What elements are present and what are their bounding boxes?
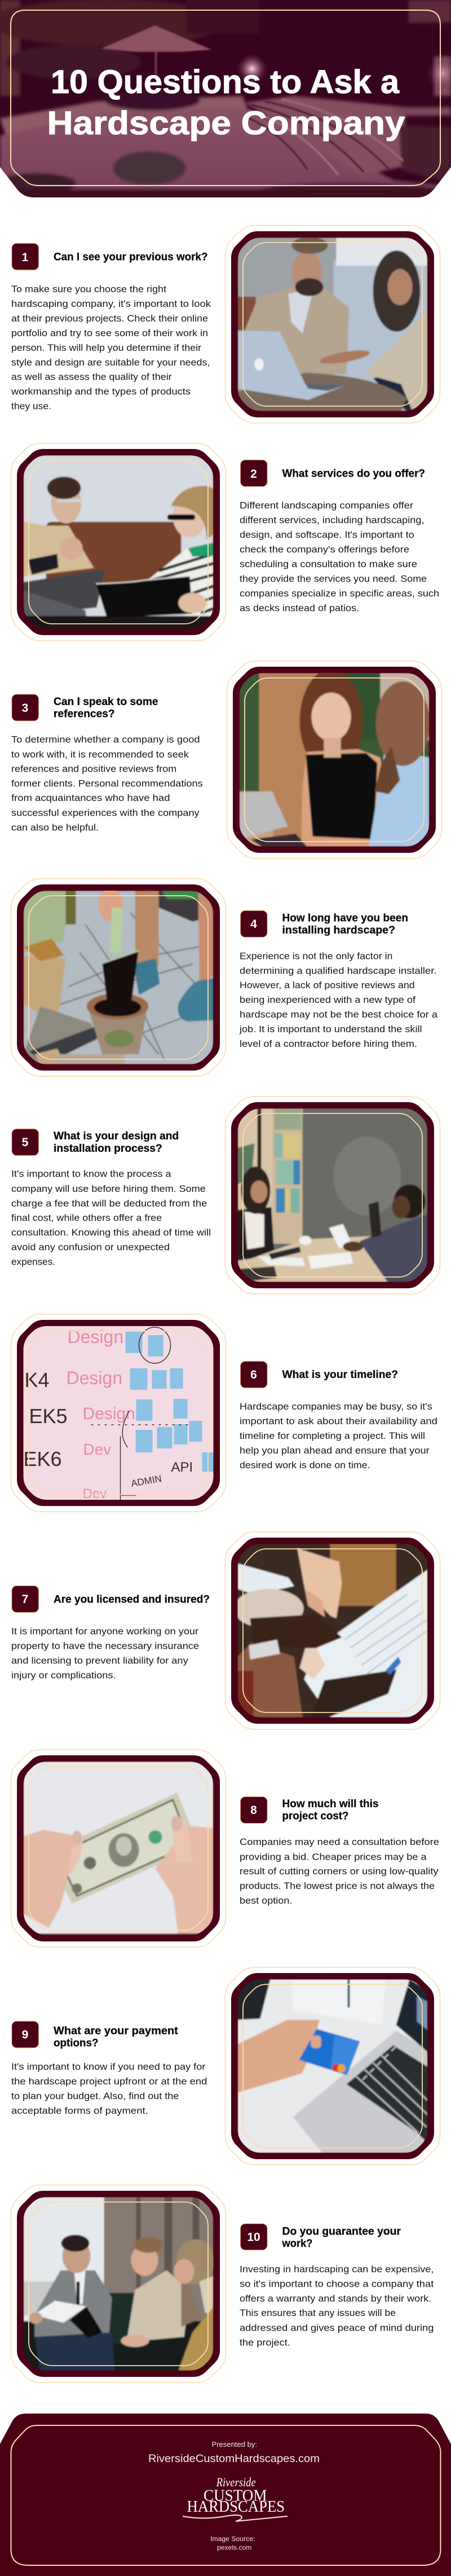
logo [183,2475,288,2521]
body text 2: check the company's offerings before [240,544,409,554]
heading 9 [54,2025,178,2049]
image source link: pexels.com [217,2544,251,2552]
photo frame 8: hands holding a dollar bill [11,1750,226,1947]
body text 10: offers a warranty and stands by their work. [240,2293,431,2304]
heading 7: Are you licensed and insured? [54,1593,210,1605]
body text 8: products. The lowest price is not always the [240,1881,435,1891]
photo frame 6: whiteboard with sticky notes: ADMIN [130,1473,162,1489]
body text 4: being inexperienced with a new type of [240,994,415,1005]
heading 3 [54,695,158,720]
body text 1: at their previous projects. Check their online [11,313,208,324]
body text 1: as well as assess the quality of their [11,371,172,382]
body text 7 [11,1626,199,1680]
body text 5: company will use before hiring them. Some [11,1183,206,1194]
body text 8: Companies may need a consultation before [240,1837,439,1847]
body text 4: hardscape may not be the best choice for a [240,1009,438,1020]
photo frame 10: three people on a sofa [11,2185,226,2383]
body text 4: determining a qualified hardscape installer. [240,966,436,976]
number badge 4: 4 [250,918,257,931]
photo frame 6: whiteboard with sticky notes: Design [67,1368,122,1388]
heading 10: Do you guarantee your [282,2225,401,2238]
body text 5 [11,1169,211,1267]
number badge 9 [11,2021,39,2048]
body text 10: Investing in hardscaping can be expensive, [240,2264,434,2274]
body text 3: successful experiences with the company [11,808,200,818]
heading 8: project cost? [282,1809,348,1822]
number badge 7 [11,1586,39,1613]
photo frame 6: whiteboard with sticky notes: K4 [25,1368,50,1392]
number badge 8 [240,1796,267,1824]
number badge 10 [240,2223,267,2251]
heading 9: What are your payment [54,2025,178,2037]
panel: question 9 [11,1967,440,2165]
photo frame 4: trowel and flower pot [11,879,226,1076]
header photo: patio at night [0,0,451,199]
number badge 10: 10 [247,2231,260,2244]
number badge 4 [240,910,267,937]
number badge 1 [11,243,39,270]
body text 10: so it's important to choose a company that [240,2278,434,2289]
body text 5: final cost, while others offer a free [11,1213,162,1223]
body text 6: Hardscape companies may be busy, so it's [240,1401,432,1412]
body text 5: consultation. Knowing this ahead of time will [11,1227,211,1238]
photo frame 6: whiteboard with sticky notes: Design [68,1327,123,1347]
body text 2: companies specialize in specific areas, such [240,588,439,598]
heading 5: What is your design and [54,1130,179,1142]
body text 2: as decks instead of patios. [240,603,359,614]
heading 10: work? [282,2237,312,2249]
body text 3: To determine whether a company is good [11,734,200,745]
body text 1: person. This will help you determine if their [11,342,201,353]
header banner [0,0,451,199]
body text 5: It's important to know the process a [11,1169,171,1179]
body text 8: best option. [240,1895,292,1906]
body text 2: different services, including hardscaping, [240,515,424,526]
body text 3: references and positive reviews from [11,764,176,774]
photo frame 6: whiteboard with sticky notes: API [171,1460,193,1475]
body text 9: It's important to know if you need to pay for [11,2061,206,2072]
photo frame 6: whiteboard with sticky notes: EK5 [29,1404,68,1428]
body text 7: property to have the necessary insurance [11,1641,199,1652]
photo frame 6: whiteboard with sticky notes [11,1314,226,1512]
body text 6: desired work is done on time. [240,1460,370,1470]
body text 10: the project. [240,2337,290,2348]
body text 4 [239,951,438,1049]
body text 4: However, a lack of positive reviews and [240,980,415,990]
body text 6: important to ask about their availability and [240,1416,437,1426]
body text 5: expenses. [11,1257,55,1267]
header border [11,10,440,186]
photo frame 6: whiteboard with sticky notes: Dev [82,1486,107,1501]
body text 1: they use. [11,400,51,412]
panel: question 5 [11,1097,440,1294]
body text 5: charge a fee that will be deducted from the [11,1198,207,1209]
number badge 2: 2 [250,468,257,481]
panel: question 4 [11,879,438,1076]
body text 9: acceptable forms of payment. [11,2105,148,2116]
heading 5: installation process? [54,1142,162,1155]
body text 10 [240,2264,434,2348]
photo frame 1: man and woman at laptop [226,226,440,423]
photo frame 6: whiteboard with sticky notes: EK6 [24,1447,62,1470]
website: RiversideCustomHardscapes.com [148,2452,320,2465]
body text 1: workmanship and the types of products [11,386,191,397]
body text 2: design, and softscape. It's important to [240,529,414,540]
body text 4: level of a contractor before hiring them. [240,1038,417,1049]
heading 3: Can I speak to some [54,695,158,708]
image source: Image Source: [210,2535,255,2543]
body text 8: result of cutting corners or using low-quality [240,1866,439,1877]
body text 1: hardscaping company, it's important to look [11,298,211,309]
number badge 6 [240,1361,267,1388]
heading 8 [282,1798,379,1822]
number badge 7: 7 [22,1593,28,1606]
body text 1: portfolio and try to see some of their work in [11,328,208,338]
title [47,64,405,142]
title: 10 Questions to Ask a [51,64,400,100]
body text 3: to work with, it is recommended to seek [11,749,189,760]
body text 4: job. It is important to understand the skill [239,1024,422,1034]
body text 6: timeline for completing a project. This will [240,1430,425,1441]
number badge 9: 9 [22,2028,28,2041]
heading 6: What is your timeline? [282,1368,398,1381]
photo frame 9: credit card and laptop [226,1967,440,2165]
body text 7: and licensing to prevent liability for any [11,1655,188,1666]
body text 3: can also be helpful. [11,822,99,833]
number badge 2 [240,460,267,487]
presented by: Presented by: [212,2441,257,2449]
number badge 3: 3 [22,702,28,715]
photo frame 2: couple with notebook on sofa [11,443,226,641]
logo: Riverside [216,2475,256,2489]
body text 6 [240,1401,437,1470]
number badge 5 [11,1129,39,1156]
body text 8 [240,1837,439,1906]
panel: question 8 [11,1750,439,1947]
body text 9 [11,2061,207,2116]
body text 6: help you plan ahead and ensure that your [240,1445,430,1456]
body text 2 [240,500,439,614]
body text 9: to plan your budget. Also, find out the [11,2090,179,2102]
body text 5: avoid any confusion or unexpected [11,1242,170,1253]
panel: question 10 [11,2185,434,2383]
photo frame 3: two women talking [227,661,442,858]
body text 4: Experience is not the only factor in [240,951,392,962]
logo: HARDSCAPES [187,2498,285,2516]
number badge 5: 5 [22,1136,29,1149]
heading 1: Can I see your previous work? [54,251,207,263]
body text 1: To make sure you choose the right [11,284,166,294]
photo frame 5: office consultation [226,1097,440,1294]
number badge 3 [11,694,39,721]
number badge 8: 8 [250,1804,257,1817]
heading 3: references? [54,708,115,720]
body text 7: injury or complications. [11,1670,116,1680]
photo frame 6: whiteboard with sticky notes: Design [82,1404,135,1423]
panel: question 1 [11,226,440,423]
body text 2: Different landscaping companies offer [240,500,413,510]
heading 4: installing hardscape? [282,924,395,936]
heading 5 [54,1130,179,1155]
body text 2: scheduling a consultation to make sure [240,559,417,570]
footer panel [0,2414,451,2576]
heading 4 [282,912,408,936]
panel: question 3 [11,661,442,858]
body text 10: addressed and gives peace of mind during [240,2323,434,2333]
panel: question 7 [11,1532,440,1729]
body text 9: the hardscape project upfront or at the end [11,2076,207,2087]
body text 8: providing a bid. Cheaper prices may be a [240,1851,427,1862]
heading 2: What services do you offer? [282,467,425,479]
title: Hardscape Company [47,105,405,142]
number badge 6: 6 [250,1368,257,1381]
photo frame 6: whiteboard with sticky notes: Dev [83,1441,111,1458]
number badge 1: 1 [22,251,29,264]
body text 1: style and design are suitable for your needs, [11,357,210,368]
panel: question 6 [11,1314,437,1512]
body text 3 [11,734,203,833]
photo frame 7: hands reviewing a contract [226,1532,440,1729]
panel: question 2 [11,443,439,641]
heading 9: options? [54,2037,98,2049]
heading 8: How much will this [282,1798,379,1810]
body text 7: It is important for anyone working on your [11,1626,198,1636]
body text 2: they provide the services you need. Some [240,573,427,584]
body text 3: from acquaintances who have had [11,792,170,803]
heading 10 [282,2225,401,2249]
body text 3: former clients. Personal recommendations [11,778,203,789]
body text 10: This ensures that any issues will be [240,2308,396,2318]
logo: CUSTOM [204,2486,267,2504]
body text 1 [11,284,211,412]
heading 4: How long have you been [282,912,408,924]
